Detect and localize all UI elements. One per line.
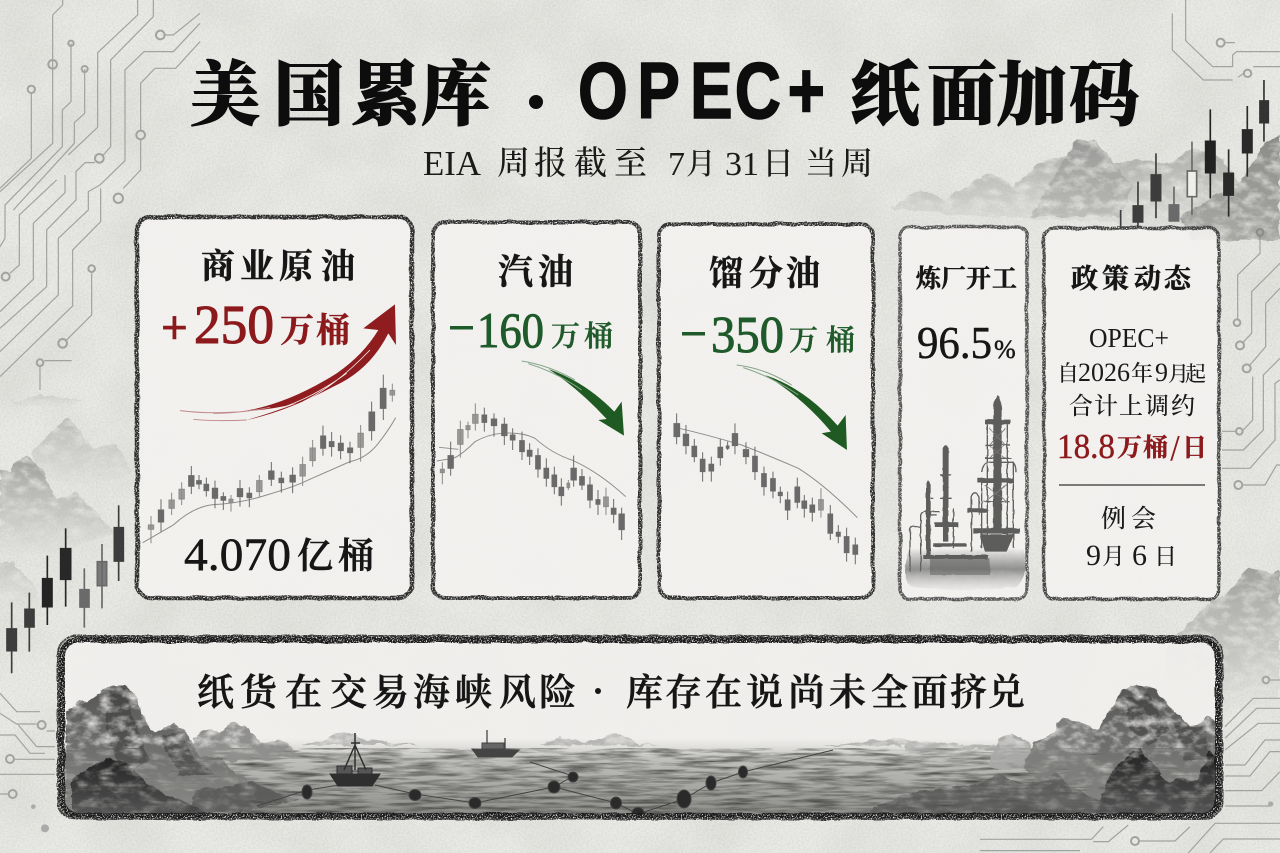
text: regular meeting date: 月 [1102,538,1125,571]
subtitle: 7 [668,146,685,183]
panel: distillates [659,224,873,598]
value: crude change: 万桶 [280,303,350,352]
icon: ship foreground [330,733,380,786]
value: crude stock total: 4.070 [184,529,291,581]
value: gasoline change: 160 [477,302,544,358]
value: 18.8 万桶/日: 18.8 [1057,427,1115,466]
caption: 纸货在交易海峡风险 [197,662,576,716]
panel: policy [1044,228,1219,599]
circuit traces: right side [1222,229,1280,489]
text: OPEC+ policy: 月起 [1168,358,1206,388]
arrow: green downward [737,365,847,450]
candlestick chart: crude rising [143,375,396,543]
title [190,39,1139,140]
value: crude change: 250 [194,294,274,355]
circuit traces: lower left [0,693,55,832]
circuit traces: lower right [980,677,1280,853]
text: OPEC+ policy: 2026 [1078,358,1130,387]
mountains: lower right [1165,565,1280,720]
value: crude change: + [161,301,188,353]
text: regular meeting date: 9 [1086,539,1101,572]
candlestick chart: distillates falling [674,413,858,564]
panel: commercial crude [137,217,412,598]
heading: refinery: 炼厂开工 [915,259,1017,295]
value: gasoline change: 万桶 [551,314,613,355]
value: crude stock total: 亿桶 [297,528,374,579]
subtitle: 周报截至 [497,137,647,184]
icon: chain of mines [257,750,833,818]
value: distillate change: 万桶 [789,318,855,359]
value: distillate change [682,307,855,364]
value: refinery rate: % [994,335,1016,364]
text: OPEC+ policy: OPEC+ [1089,323,1169,353]
heading: gasoline: 汽油 [498,245,573,295]
title: 纸面加码 [850,39,1139,140]
panel: bottom strait scene [58,636,1222,819]
text: regular meeting date: 日 [1154,538,1177,571]
text: OPEC+ policy: 年 [1131,357,1153,388]
title: OPEC+ [578,46,825,136]
panel: gasoline [433,222,640,598]
text: OPEC+ policy [1057,323,1206,421]
value: crude stock total [184,528,374,581]
heading: policy: 政策动态 [1071,257,1193,296]
distant hills [300,732,1000,750]
subtitle [423,137,873,184]
text: regular meeting date: 6 [1132,539,1147,572]
panel: refinery utilisation [900,227,1027,599]
text: regular meeting date [1086,499,1177,572]
subtitle: 31 [725,146,759,183]
candlesticks: upper right decoration [1121,80,1268,227]
text: OPEC+ policy: 合计上调约 [1069,386,1195,421]
mountains: left [0,395,133,613]
caption [197,662,1025,716]
text: OPEC+ policy: 自 [1057,357,1079,388]
subtitle: 日当周 [762,138,873,184]
icon: refinery towers [905,395,1026,590]
circuit traces: upper left [0,0,200,390]
icon: ship distant [472,730,519,757]
caption: 库存在说尚未全面挤兑 [626,662,1025,716]
subtitle: 月 [686,139,716,183]
arrow: green downward [522,361,624,436]
value: crude change [161,294,350,355]
value: gasoline change [450,302,613,358]
subtitle: EIA [423,144,482,183]
candlestick chart: gasoline falling [437,403,626,540]
mountains: left in panel [66,685,300,815]
text: OPEC+ policy: 9 [1155,358,1168,387]
value: refinery rate: 96.5 [917,317,992,368]
ink frame [58,636,1222,819]
value: 18.8 万桶/日: 万桶/日 [1117,428,1207,464]
arrow: red upward [180,304,396,421]
mountains: upper right [890,133,1280,240]
sea [64,738,1216,816]
heading: commercial crude: 商业原油 [201,239,355,288]
circuit traces: upper right [1172,0,1280,80]
value: 18.8 万桶/日 [1057,427,1207,466]
title: 美国累库 [190,39,491,140]
heading: distillates: 馏分油 [709,246,820,295]
candlesticks: left decoration [7,505,123,673]
mountains: right in panel [860,683,1220,815]
value: distillate change: 350 [711,307,784,364]
text: regular meeting date: 例会 [1101,499,1156,535]
